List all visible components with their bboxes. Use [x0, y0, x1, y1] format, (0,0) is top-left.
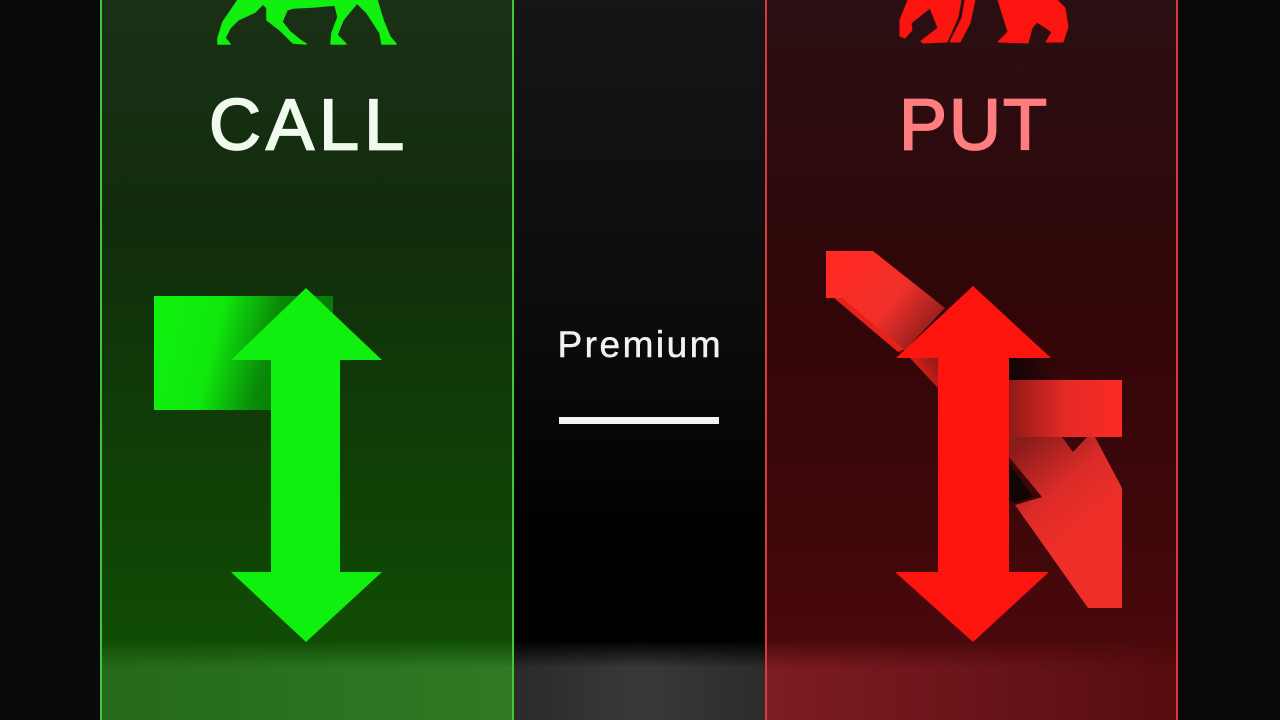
icon: bent back arrow — [154, 296, 333, 410]
panel: call — [101, 0, 513, 720]
icon: falling back arrow — [826, 251, 1122, 608]
icon: bear silhouette — [900, 0, 1068, 43]
icon: bull silhouette — [218, 0, 396, 44]
heading: put: PUT — [899, 86, 1049, 166]
center column background — [513, 0, 766, 720]
icon: double-headed arrow — [231, 288, 382, 642]
premium divider line — [559, 417, 719, 424]
heading: call: CALL — [209, 86, 409, 166]
panel: put — [766, 0, 1177, 720]
panel: premium — [558, 324, 723, 424]
icon: double-headed arrow — [895, 286, 1051, 642]
label: premium: Premium — [558, 324, 723, 365]
